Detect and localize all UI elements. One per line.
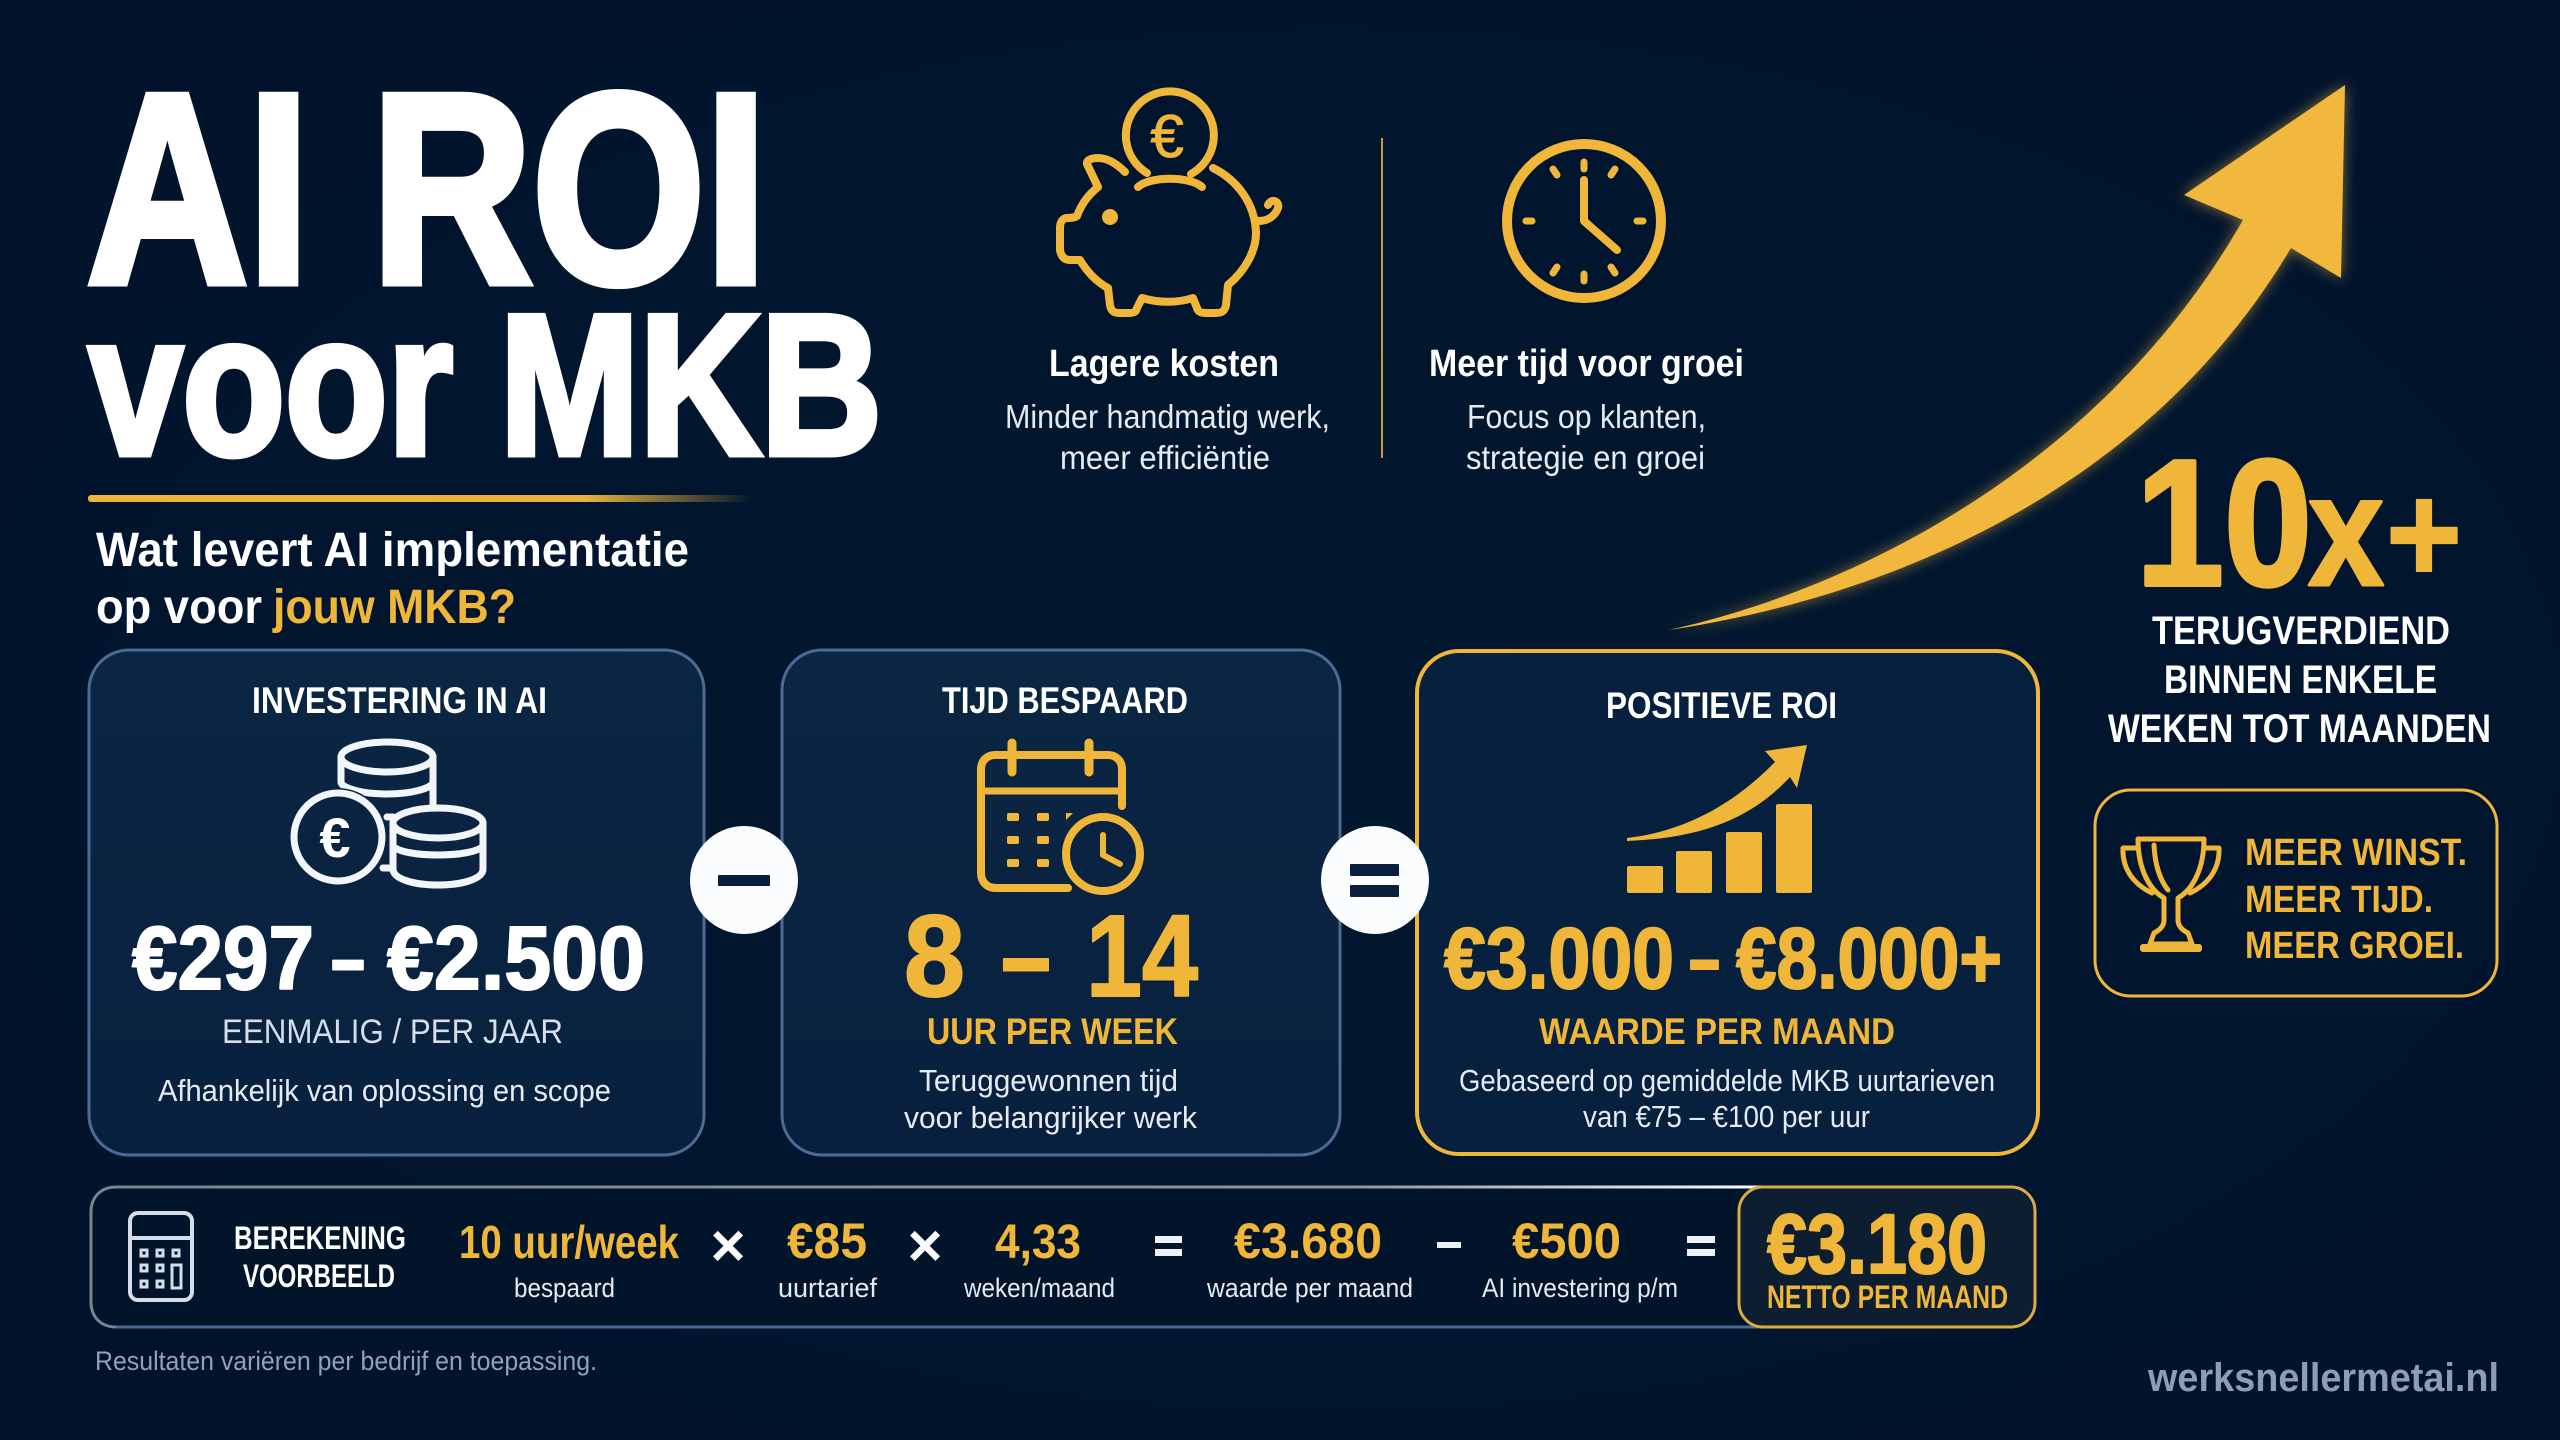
icon: euro coins	[289, 742, 483, 886]
icon: piggy bank with euro coin: €	[1150, 103, 1184, 170]
heading: Lagere kosten	[1049, 343, 1279, 385]
description: Minder handmatig werk,	[1005, 398, 1330, 435]
icon: calendar with clock	[981, 743, 1140, 891]
term: 10 uur/week	[459, 1216, 679, 1303]
operator: minus	[690, 826, 798, 934]
panel: positieve ROI	[1417, 651, 2038, 1154]
value: €297	[132, 909, 314, 1009]
icon: rising bar chart	[1627, 745, 1812, 893]
benefit: meer tijd voor groei	[1429, 144, 1744, 476]
term: €500: AI investering p/m	[1482, 1273, 1678, 1303]
operator: equals	[1321, 826, 1429, 934]
title line 2: voor MKB	[89, 274, 882, 497]
arrow: growth	[1669, 85, 2345, 630]
subtitle: Wat levert AI implementatie	[96, 524, 689, 577]
description: strategie en groei	[1466, 439, 1705, 476]
icon: clock	[1507, 144, 1661, 298]
operator: times: ×	[710, 1212, 746, 1279]
heading: INVESTERING IN AI	[252, 680, 547, 721]
result box: NETTO PER MAAND	[1767, 1279, 2008, 1315]
website: werksnellermetai.nl	[2147, 1356, 2499, 1400]
note: Teruggewonnen tijd	[919, 1063, 1178, 1098]
title line 1: AI ROI	[87, 39, 767, 340]
heading: POSITIEVE ROI	[1606, 685, 1837, 726]
subtitle: jouw MKB?	[272, 581, 516, 634]
operator: minus	[1437, 1242, 1461, 1248]
title	[87, 39, 882, 497]
stat: 10x+: +	[2386, 455, 2462, 612]
note	[1459, 1063, 1995, 1134]
note: Afhankelijk van oplossing en scope	[158, 1073, 611, 1108]
value: €8.000+	[1736, 911, 2002, 1007]
label: WAARDE PER MAAND	[1539, 1011, 1895, 1052]
icon: piggy bank with euro coin	[1060, 91, 1278, 313]
description	[1005, 398, 1330, 476]
text: MEER GROEI.	[2245, 925, 2464, 967]
stat: 10x+: x	[2308, 443, 2384, 619]
term: €500: €500	[1512, 1213, 1621, 1269]
value: €2.500	[387, 909, 645, 1009]
icon: euro coins: €	[319, 806, 351, 869]
disclaimer: Resultaten variëren per bedrijf en toepassing.	[95, 1346, 597, 1376]
description	[1466, 398, 1706, 476]
description: meer efficiëntie	[1060, 439, 1270, 476]
label: VOORBEELD	[243, 1258, 395, 1294]
term: 4,33: weken/maand	[963, 1273, 1115, 1303]
benefit: lagere kosten	[1005, 91, 1330, 476]
panel: meer winst	[2095, 790, 2497, 996]
term: 4,33: 4,33	[995, 1216, 1081, 1269]
heading: Meer tijd voor groei	[1429, 343, 1744, 385]
heading: TIJD BESPAARD	[942, 680, 1188, 721]
stat caption: BINNEN ENKELE	[2164, 658, 2437, 702]
stat caption: TERUGVERDIEND	[2152, 609, 2450, 653]
label: BEREKENING	[234, 1220, 406, 1256]
label: EENMALIG / PER JAAR	[222, 1013, 563, 1051]
value	[1444, 911, 2002, 1007]
term: €85: €85	[787, 1213, 867, 1269]
note: voor belangrijker werk	[904, 1100, 1197, 1135]
operator: equals	[1687, 1236, 1715, 1256]
stat: 10x+: 10	[2136, 423, 2312, 624]
term: €500	[1482, 1213, 1678, 1303]
term: €85: uurtarief	[778, 1273, 877, 1303]
value: 14	[1086, 891, 1198, 1021]
text: MEER TIJD.	[2245, 879, 2433, 921]
term: €3.680	[1206, 1213, 1413, 1303]
operator: times: ×	[907, 1212, 943, 1279]
stat caption: WEKEN TOT MAANDEN	[2108, 707, 2491, 751]
note	[904, 1063, 1197, 1135]
note: Gebaseerd op gemiddelde MKB uurtarieven	[1459, 1063, 1995, 1098]
description: Focus op klanten,	[1467, 398, 1706, 435]
term: 10 uur/week: bespaard	[514, 1273, 615, 1303]
text	[2245, 832, 2467, 967]
term: 10 uur/week: 10 uur/week	[459, 1216, 679, 1268]
term: €3.680: €3.680	[1234, 1213, 1382, 1269]
icon: trophy	[2123, 839, 2219, 952]
value	[904, 891, 1198, 1021]
result box	[1739, 1187, 2035, 1327]
panel: berekening voorbeeld	[91, 1187, 2035, 1327]
value: €3.000	[1444, 911, 1674, 1007]
panel: investering in AI	[89, 650, 704, 1155]
label: UUR PER WEEK	[927, 1011, 1178, 1052]
subtitle: op voor	[96, 581, 262, 634]
term: 4,33	[963, 1216, 1115, 1303]
value: –	[1689, 911, 1720, 1007]
value: –	[331, 909, 365, 1009]
operator: equals	[1155, 1236, 1182, 1256]
value: –	[1001, 891, 1051, 1021]
term: €3.680: waarde per maand	[1206, 1273, 1413, 1303]
text: MEER WINST.	[2245, 832, 2467, 874]
note: van €75 – €100 per uur	[1583, 1099, 1870, 1134]
value: 8	[904, 891, 965, 1021]
stat caption	[2108, 609, 2491, 751]
icon: calculator	[130, 1213, 192, 1300]
panel: tijd bespaard	[782, 650, 1340, 1155]
title underline	[88, 495, 752, 502]
value	[132, 909, 645, 1009]
subtitle	[96, 524, 689, 634]
label	[234, 1220, 406, 1294]
stat: 10x+	[2136, 423, 2462, 624]
result box: €3.180	[1767, 1197, 1987, 1291]
term: €85	[778, 1213, 877, 1303]
